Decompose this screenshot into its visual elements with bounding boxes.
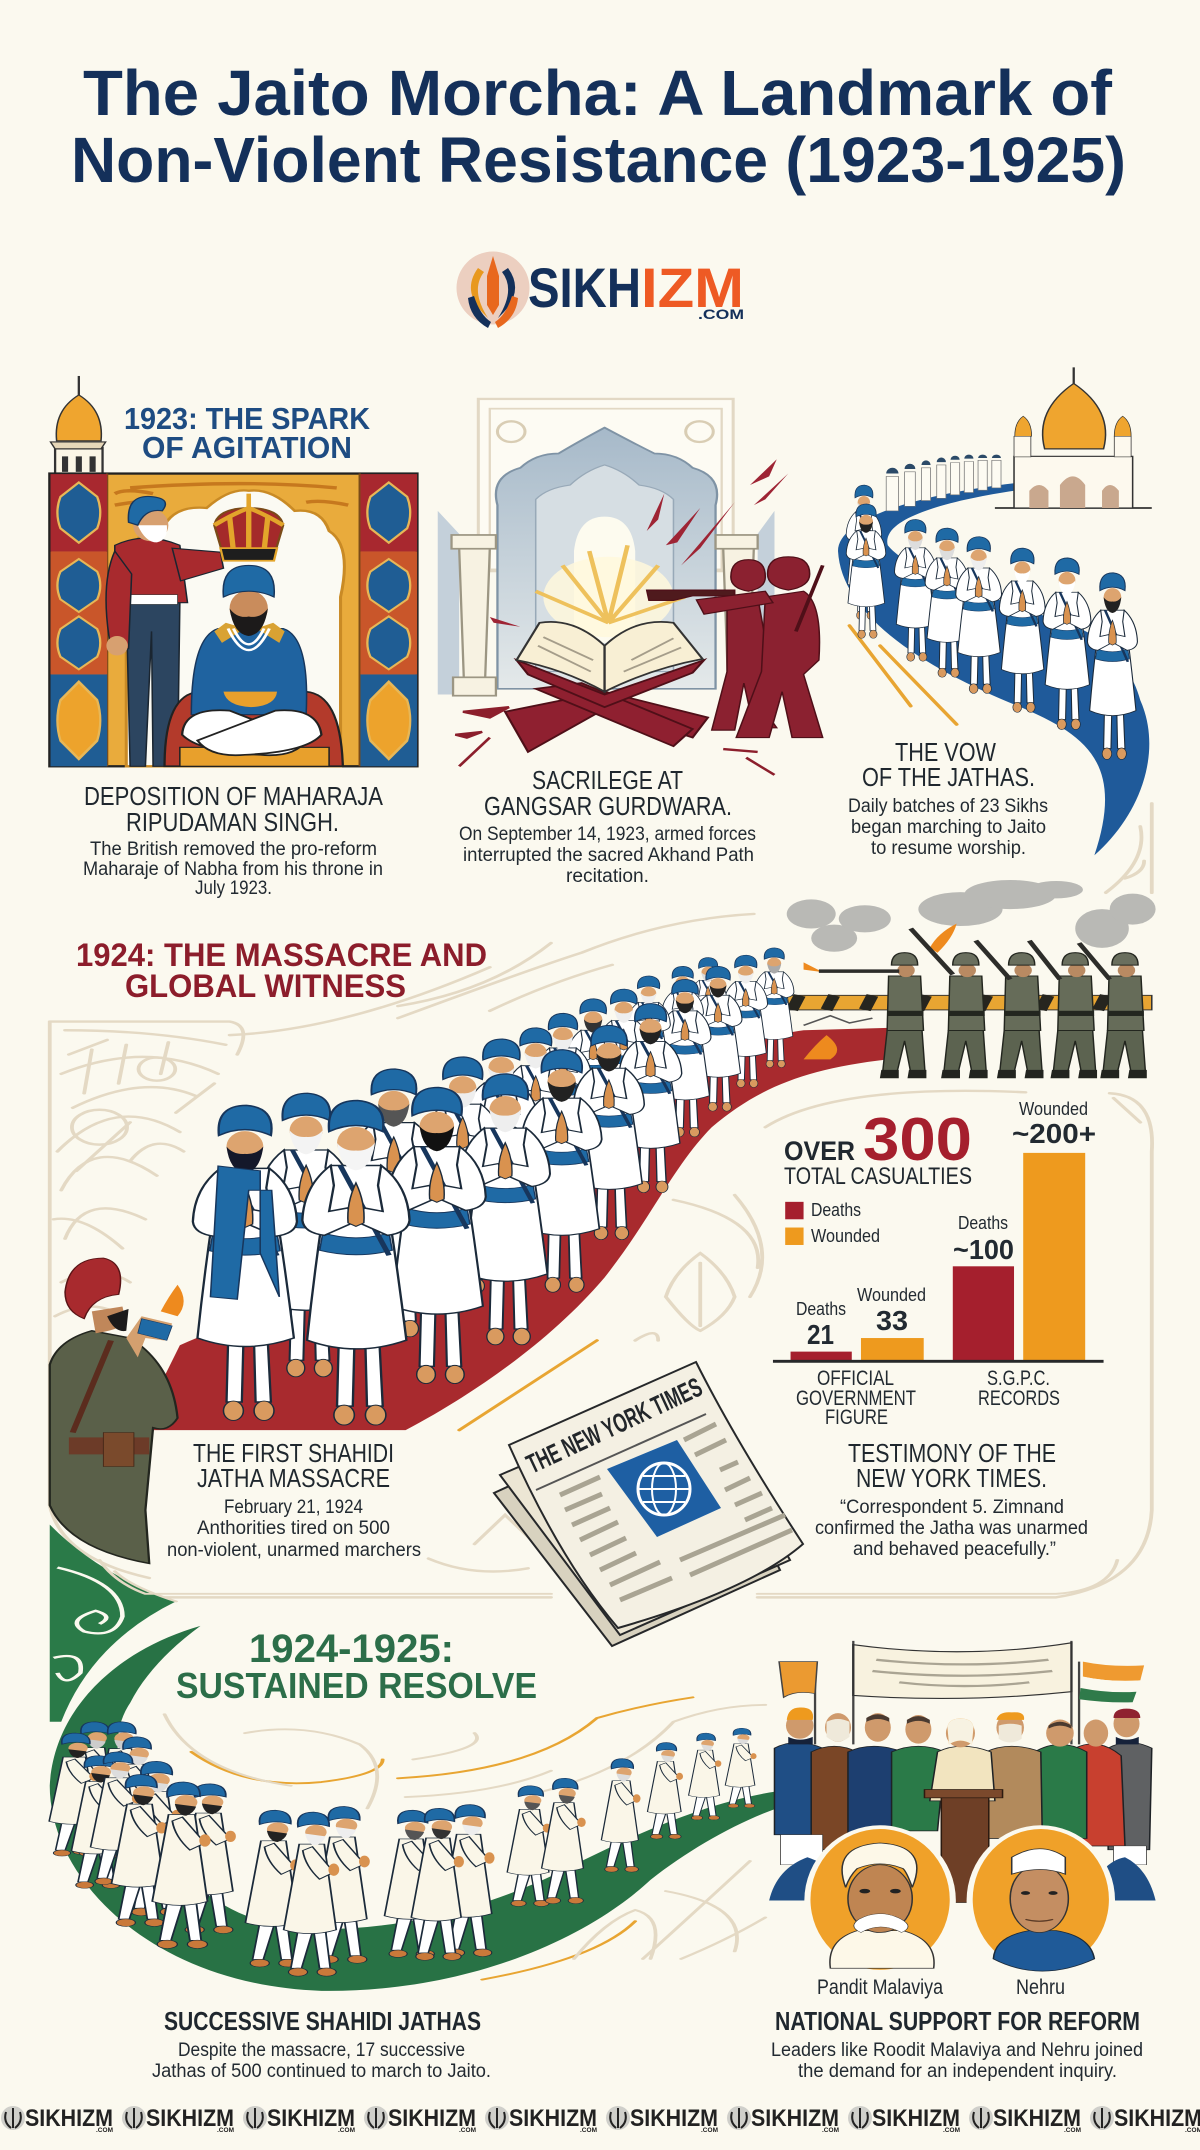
text: first Shahidi Jatha: JATHA MASSACRE xyxy=(197,1463,390,1493)
text: chart labels: Wounded xyxy=(857,1285,926,1305)
flames xyxy=(804,924,957,1059)
text: deposition: Maharaje of Nabha from his throne in xyxy=(83,859,383,880)
section 1923 artwork xyxy=(50,367,1152,893)
text: deposition: RIPUDAMAN SINGH. xyxy=(126,807,339,837)
text: first Shahidi Jatha: non-violent, unarmed marchers xyxy=(167,1540,421,1561)
text: testimony: TESTIMONY OF THE xyxy=(848,1438,1056,1468)
shards xyxy=(490,459,788,627)
Maharaja xyxy=(165,565,343,766)
text: first Shahidi Jatha: THE FIRST SHAHIDI xyxy=(193,1438,394,1468)
text: successive Jathas xyxy=(152,2006,491,2082)
text: vow of the Jathas xyxy=(848,737,1048,859)
text: deposition: DEPOSITION OF MAHARAJA xyxy=(84,781,384,811)
text: sacrilege: recitation. xyxy=(566,866,649,887)
text: portrait names xyxy=(817,1976,1065,1999)
portrait: Pandit Malaviya xyxy=(804,1825,956,1976)
text: sacrilege: GANGSAR GURDWARA. xyxy=(484,791,732,821)
footer logo strip: SIKHIZM xyxy=(630,2105,718,2132)
soldiers with rifles xyxy=(647,557,823,738)
text: chart labels: Deaths xyxy=(958,1213,1008,1233)
panel: sacrilege at Gangsar xyxy=(438,399,823,775)
firing line of soldiers xyxy=(819,928,1147,1078)
barrier xyxy=(784,995,1152,1025)
footer logo strip: .COM xyxy=(943,2128,960,2134)
title xyxy=(71,57,1126,196)
text: chart labels: S.G.P.C. xyxy=(987,1367,1050,1390)
footer logo strip xyxy=(1,2105,1200,2134)
text: sacrilege: interrupted the sacred Akhand Path xyxy=(463,845,754,866)
text: portrait names: Pandit Malaviya xyxy=(817,1976,943,1999)
text: chart labels: Deaths xyxy=(796,1299,846,1319)
text: sacrilege: On September 14, 1923, armed forces xyxy=(459,824,756,845)
text: sacrilege: SACRILEGE AT xyxy=(532,765,683,795)
crown xyxy=(214,494,283,561)
title: The Jaito Morcha: A Landmark of xyxy=(83,57,1113,129)
book on stand xyxy=(505,622,708,752)
footer logo strip: SIKHIZM xyxy=(267,2105,355,2132)
text: successive Jathas: SUCCESSIVE SHAHIDI JATHAS xyxy=(164,2006,481,2036)
text: chart labels: Wounded xyxy=(811,1226,880,1246)
text: chart labels xyxy=(784,1099,1096,1429)
text: 1924-1925 heading: SUSTAINED RESOLVE xyxy=(176,1665,537,1706)
text: chart labels: 21 xyxy=(807,1319,834,1350)
smoke xyxy=(787,880,1156,952)
text: 1924 heading xyxy=(76,937,487,1004)
text: vow of the Jathas: OF THE JATHAS. xyxy=(862,762,1035,792)
text: successive Jathas: Jathas of 500 continued to march to Jaito. xyxy=(152,2061,491,2082)
footer logo strip: SIKHIZM xyxy=(751,2105,839,2132)
footer logo strip: SIKHIZM xyxy=(388,2105,476,2132)
text: 1924-1925 heading: 1924-1925: xyxy=(249,1627,454,1671)
text: vow of the Jathas: THE VOW xyxy=(895,737,996,767)
road xyxy=(138,1028,888,1430)
footer logo strip: .COM xyxy=(459,2128,476,2134)
footer logo strip: SIKHIZM xyxy=(509,2105,597,2132)
ornamental frame xyxy=(50,914,1152,1597)
footer logo strip: SIKHIZM xyxy=(993,2105,1081,2132)
text: successive Jathas: Despite the massacre, 17 successive xyxy=(178,2040,465,2061)
portrait: Nehru xyxy=(967,1825,1115,1976)
footer logo strip: .COM xyxy=(822,2128,839,2134)
text: chart labels: TOTAL CASUALTIES xyxy=(784,1163,972,1190)
footer logo strip: .COM xyxy=(217,2128,234,2134)
small marchers xyxy=(886,455,1001,511)
text: chart labels: Deaths xyxy=(811,1200,861,1220)
text: sacrilege xyxy=(459,765,756,887)
text: deposition: The British removed the pro-reform xyxy=(90,839,377,860)
text: 1923 heading: OF AGITATION xyxy=(142,430,352,465)
white legs and base xyxy=(781,1835,1146,1865)
flags xyxy=(779,1662,1144,1744)
text: portrait names: Nehru xyxy=(1016,1976,1065,1999)
article lines xyxy=(560,1424,792,1600)
pillars xyxy=(452,535,758,696)
text: first Shahidi Jatha: Anthorities tired on 500 xyxy=(197,1518,390,1539)
footer logo strip: SIKHIZM xyxy=(872,2105,960,2132)
text: deposition: July 1923. xyxy=(195,878,272,899)
national leaders xyxy=(769,1641,1156,1976)
panel: the vow of the Jathas xyxy=(838,367,1152,893)
footer logo strip: SIKHIZM xyxy=(25,2105,113,2132)
logo: Sikhizm xyxy=(456,252,744,328)
globe image xyxy=(607,1440,721,1537)
text: chart labels: GOVERNMENT xyxy=(796,1387,916,1410)
text: chart labels: OFFICIAL xyxy=(817,1367,894,1390)
text: 1924-1925 heading xyxy=(176,1627,537,1706)
text: first Shahidi Jatha: February 21, 1924 xyxy=(224,1497,363,1518)
section 1924-1925 artwork xyxy=(49,1525,1156,1991)
newspaper xyxy=(494,1362,803,1646)
footer logo strip: .COM xyxy=(96,2128,113,2134)
footer logo strip: SIKHIZM xyxy=(146,2105,234,2132)
green road xyxy=(50,1626,777,1991)
text: vow of the Jathas: Daily batches of 23 Sikhs xyxy=(848,796,1048,817)
banner xyxy=(853,1641,1071,1744)
text: testimony: and behaved peacefully.” xyxy=(853,1539,1056,1560)
text: 1924 heading: GLOBAL WITNESS xyxy=(125,968,406,1004)
text: testimony: “Correspondent 5. Zimnand xyxy=(840,1497,1064,1518)
light rays xyxy=(536,545,685,623)
text: testimony: confirmed the Jatha was unarmed xyxy=(815,1518,1088,1539)
swirls xyxy=(165,1697,765,1980)
text: vow of the Jathas: began marching to Jaito xyxy=(851,817,1046,838)
footer logo strip: .COM xyxy=(338,2128,355,2134)
text: chart labels: ~100 xyxy=(953,1234,1014,1265)
logo: Sikhizm: .COM xyxy=(698,306,744,322)
text: national support: Leaders like Roodit Malaviya and Nehru joined xyxy=(771,2040,1143,2061)
logo: Sikhizm: IZM xyxy=(641,256,744,319)
text: testimony: NEW YORK TIMES. xyxy=(856,1463,1047,1493)
podium xyxy=(924,1790,1003,1902)
text: chart labels: Wounded xyxy=(1019,1099,1088,1119)
text: chart labels: 300 xyxy=(863,1106,972,1173)
section 1924 artwork xyxy=(50,880,1156,1597)
minaret xyxy=(51,376,106,474)
text: national support: the demand for an independent inquiry. xyxy=(798,2061,1117,2082)
text: testimony xyxy=(815,1438,1088,1560)
text: 1924 heading: 1924: THE MASSACRE AND xyxy=(76,937,487,973)
marching Jatha xyxy=(193,948,794,1425)
logo: Sikhizm: SIKH xyxy=(528,256,641,319)
text: chart labels: 33 xyxy=(876,1305,908,1336)
text: deposition xyxy=(83,781,384,899)
footer logo strip: .COM xyxy=(1064,2128,1081,2134)
gurdwara xyxy=(995,367,1152,508)
masthead: THE NEW YORK TIMES xyxy=(522,1372,707,1479)
footer logo strip: .COM xyxy=(580,2128,597,2134)
text: 1923 heading xyxy=(124,401,371,465)
title: Non-Violent Resistance (1923-1925) xyxy=(71,124,1126,196)
text: chart labels: OVER xyxy=(784,1136,855,1166)
footer logo strip: .COM xyxy=(701,2128,718,2134)
text: first Shahidi Jatha xyxy=(167,1438,421,1561)
text: chart labels: FIGURE xyxy=(825,1406,888,1429)
text: 1923 heading: 1923: THE SPARK xyxy=(124,401,371,436)
photographer xyxy=(50,1258,184,1563)
British officer xyxy=(106,496,223,766)
text: national support xyxy=(771,2006,1143,2082)
text: chart labels: RECORDS xyxy=(978,1387,1060,1410)
casualties chart xyxy=(773,1153,1104,1363)
panel: deposition of Maharaja xyxy=(50,376,417,766)
text: chart labels: ~200+ xyxy=(1012,1118,1096,1149)
text: vow of the Jathas: to resume worship. xyxy=(871,838,1026,859)
green corner ornament xyxy=(50,1525,1117,1722)
successive Jathas xyxy=(49,1722,757,1976)
